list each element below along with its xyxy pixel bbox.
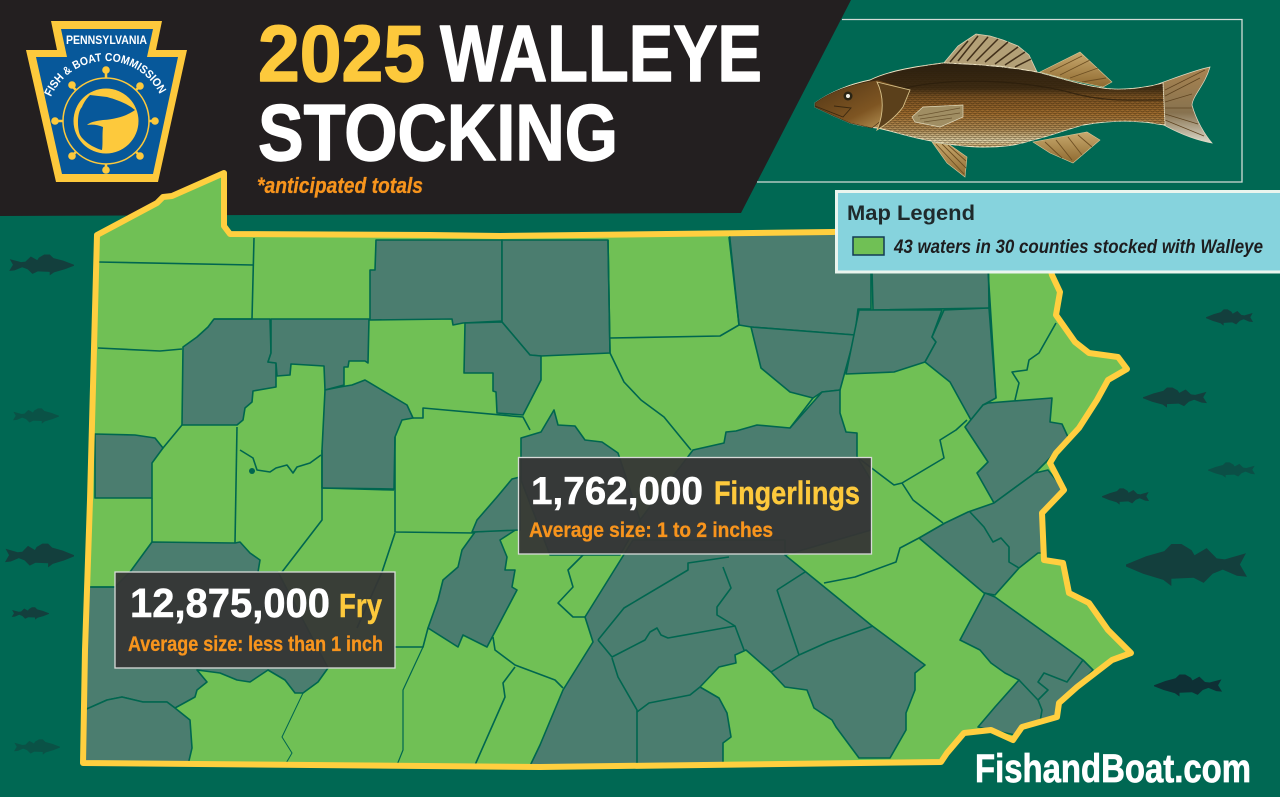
keystone outer: [26, 21, 187, 182]
callout: fingerlings: [518, 458, 872, 554]
state fill: [83, 173, 1131, 767]
second dorsal fin: [1040, 52, 1112, 87]
keystone inner: [36, 29, 178, 174]
map: Pennsylvania counties: [80, 173, 1131, 770]
county boundary lines: [85, 237, 1083, 765]
scales texture: [880, 63, 1165, 147]
non-stocked counties: [80, 230, 1093, 770]
logo text: PENNSYLVANIA: [66, 33, 147, 47]
title: [258, 9, 762, 177]
callout: fry: Average size: less than 1 inch: [128, 633, 383, 656]
callout: fry: 12,875,000: [130, 580, 330, 626]
ship wheel: [51, 66, 159, 174]
callout: fingerlings: Fingerlings: [714, 475, 860, 511]
map legend: Map Legend: [847, 202, 975, 225]
dorsal fin: [943, 34, 1037, 72]
title: 2025: [258, 9, 425, 98]
legend swatch: [853, 237, 884, 255]
logo: Pennsylvania Fish & Boat Commission keystone: [26, 21, 187, 182]
eye: [844, 92, 852, 100]
walleye image frame: [757, 20, 1242, 182]
anal fin: [1033, 132, 1100, 163]
anticipated totals note: *anticipated totals: [257, 173, 423, 198]
lateral line: [905, 81, 1163, 100]
pelvic fin: [932, 142, 967, 177]
callout: fingerlings: 1,762,000: [531, 470, 703, 513]
title: WALLEYE: [440, 9, 762, 98]
body: [815, 63, 1165, 147]
header banner: [0, 0, 851, 216]
pectoral fin: [912, 105, 963, 127]
callout: fry: Fry: [339, 587, 383, 624]
lake at county line: [249, 468, 255, 474]
counties stocked and not stocked: [80, 230, 1093, 770]
logo arc text: FISH & BOAT COMMISSION: [44, 53, 166, 96]
mouth line: [815, 106, 851, 117]
background fish silhouettes: [5, 255, 1255, 755]
gill cover: [877, 82, 910, 130]
map legend: [836, 192, 1280, 272]
callout: fry: [115, 572, 395, 668]
head: [815, 80, 904, 128]
tail: [1155, 67, 1212, 143]
callout: fingerlings: Average size: 1 to 2 inches: [529, 519, 773, 542]
title: STOCKING: [258, 88, 618, 177]
walleye illustration: [815, 34, 1212, 177]
state outline: [83, 173, 1131, 767]
